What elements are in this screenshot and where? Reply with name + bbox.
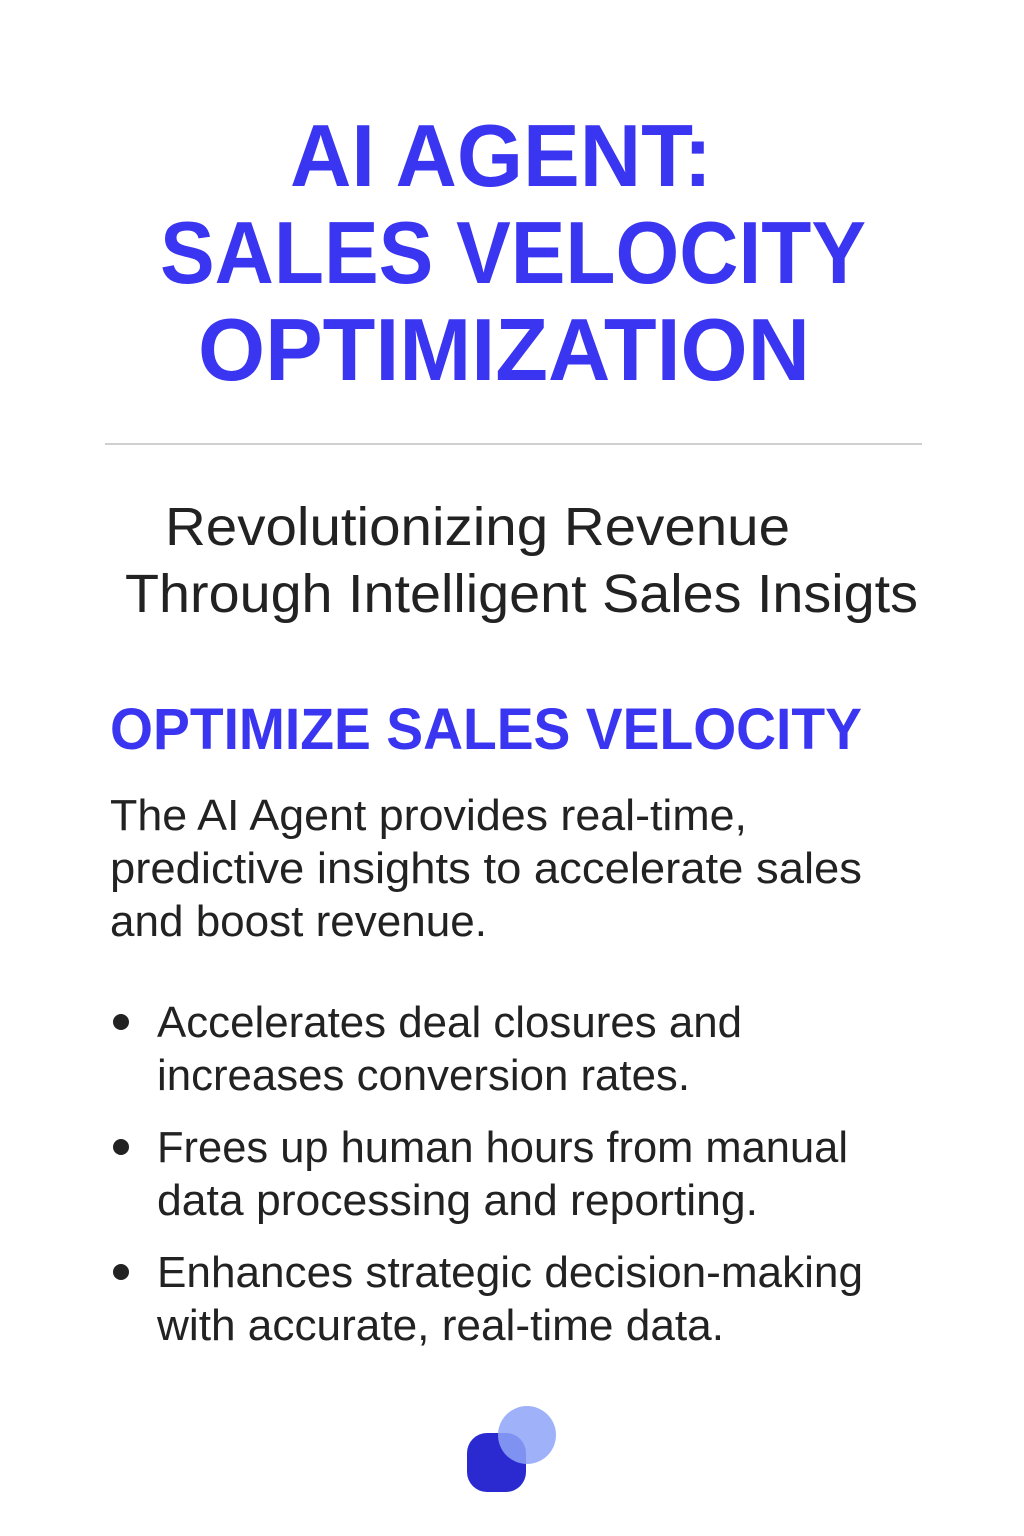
subtitle	[125, 497, 918, 624]
title: AI AGENT:	[290, 106, 712, 205]
bullet 1: Accelerates deal closures and	[157, 998, 742, 1047]
title	[160, 106, 866, 399]
bullet 2	[113, 1123, 848, 1225]
title: SALES VELOCITY	[160, 203, 866, 302]
bullet 1	[113, 998, 742, 1100]
bullet 2: Frees up human hours from manual	[157, 1123, 848, 1172]
bullet 3: with accurate, real-time data.	[156, 1301, 724, 1350]
section heading: OPTIMIZE SALES VELOCITY	[110, 697, 862, 762]
bullet 2: data processing and reporting.	[157, 1176, 758, 1225]
bullet list	[113, 998, 863, 1350]
bullet 1: increases conversion rates.	[157, 1051, 690, 1100]
intro text: The AI Agent provides real-time,	[110, 791, 747, 840]
intro text	[110, 791, 862, 946]
title: OPTIMIZATION	[198, 300, 810, 399]
intro text: and boost revenue.	[110, 897, 487, 946]
bullet 3	[113, 1248, 863, 1350]
subtitle: Through Intelligent Sales Insigts	[125, 564, 918, 624]
icon: logo	[467, 1406, 556, 1492]
bullet 3: Enhances strategic decision-making	[157, 1248, 863, 1297]
intro text: predictive insights to accelerate sales	[110, 844, 862, 893]
subtitle: Revolutionizing Revenue	[165, 497, 790, 557]
